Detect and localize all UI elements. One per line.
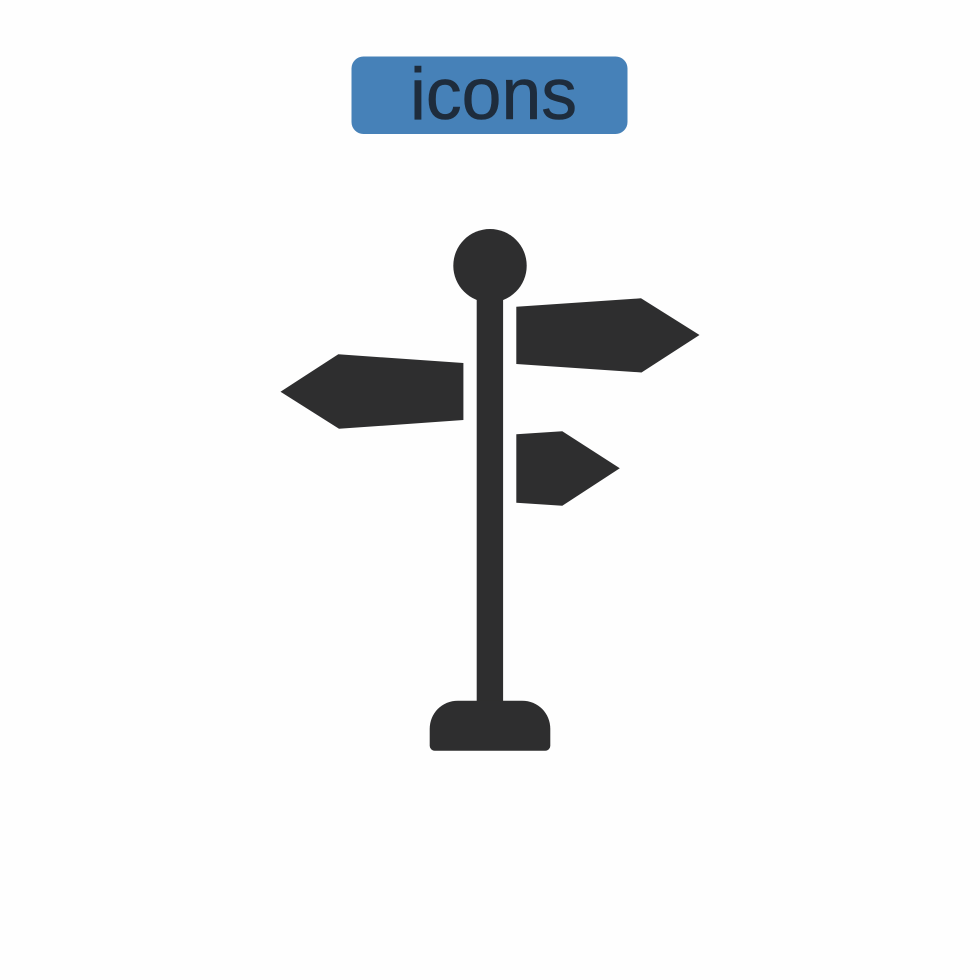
badge background bbox=[352, 56, 628, 134]
arrow: lower right sign bbox=[516, 431, 620, 506]
heading: icons: icons bbox=[410, 54, 577, 135]
arrow: upper right sign bbox=[516, 298, 700, 372]
signpost pole bbox=[477, 290, 503, 710]
badge: icons label bbox=[352, 54, 628, 135]
icon: signpost bbox=[280, 229, 700, 751]
arrow: left sign bbox=[280, 354, 463, 429]
signpost top ball bbox=[453, 229, 527, 302]
signpost base bbox=[430, 701, 550, 751]
